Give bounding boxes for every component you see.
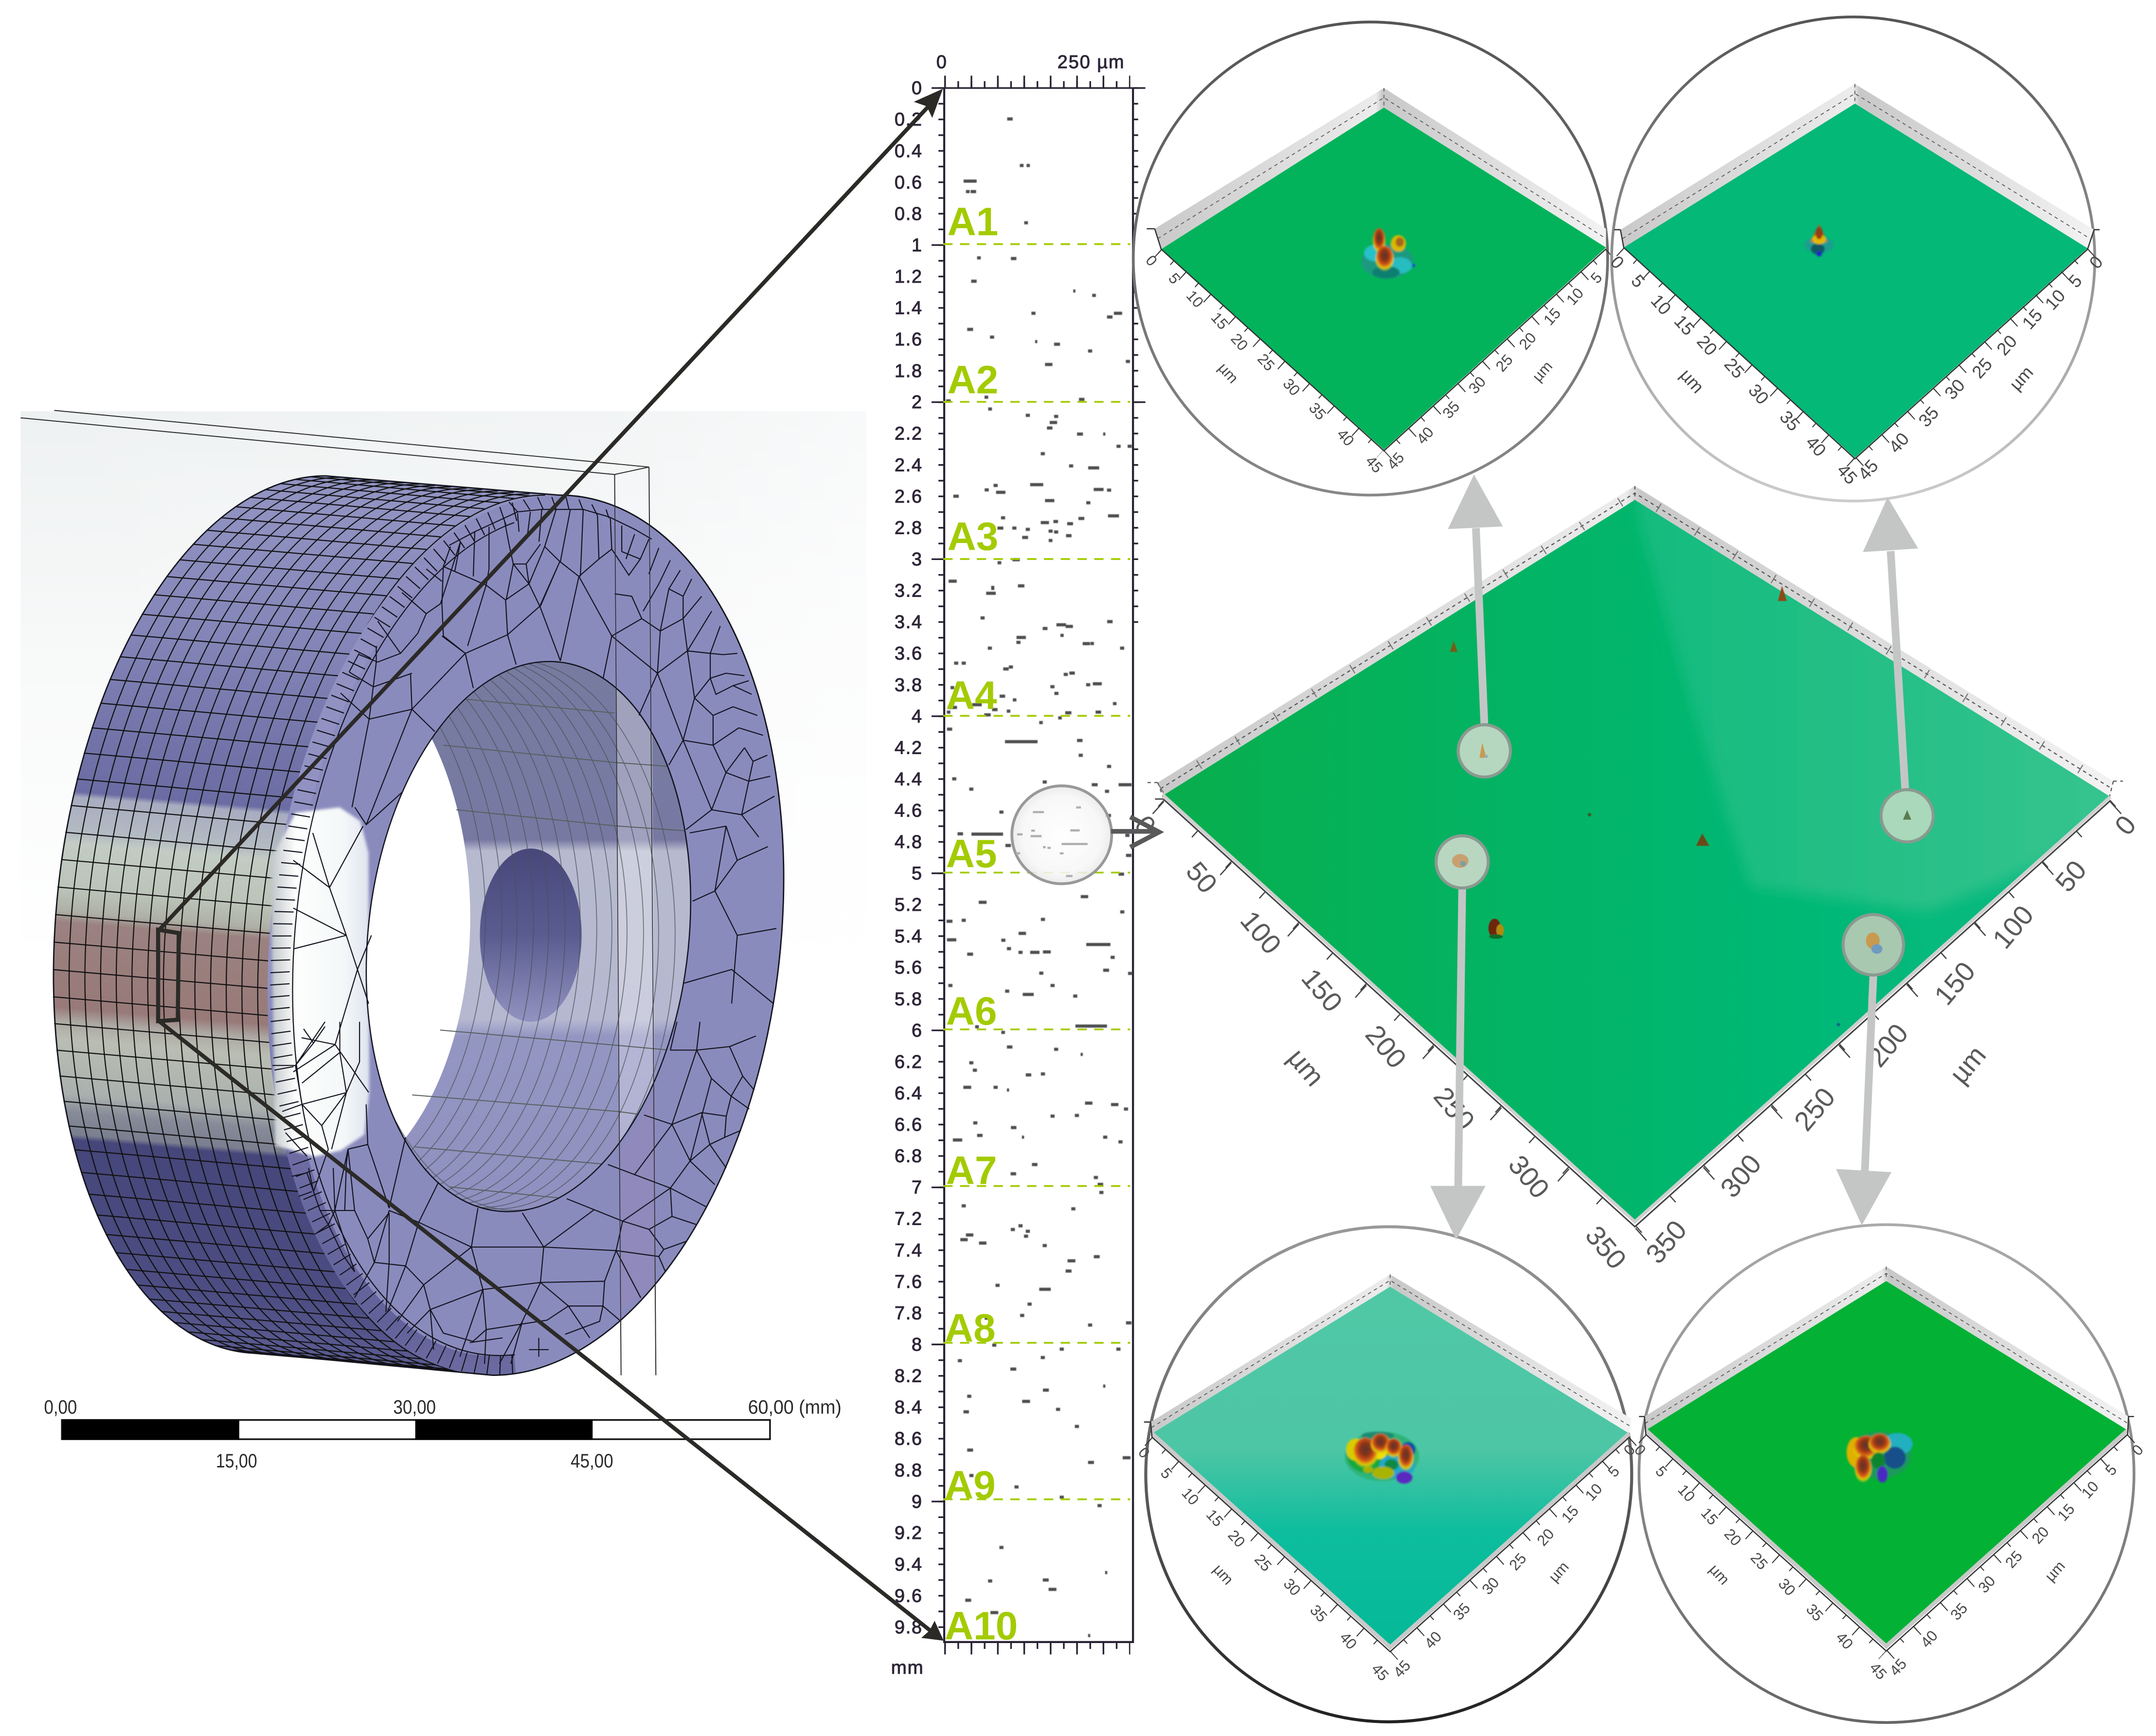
- depth axis labels in mm: 4.2: [895, 738, 923, 758]
- zoom B axis labels: 45: [1854, 456, 1882, 484]
- zoom B axis labels: 25: [1968, 354, 1996, 382]
- scale bar: 15,00: [216, 1450, 257, 1472]
- depth axis labels in mm: 8.6: [895, 1429, 923, 1449]
- depth axis labels in mm: 2.4: [895, 455, 923, 475]
- depth axis labels in mm: 3.2: [895, 580, 923, 601]
- depth axis labels in mm: 8: [912, 1335, 923, 1355]
- depth axis labels in mm: 3.8: [895, 675, 923, 695]
- zoom A axis labels: 15: [1208, 309, 1232, 333]
- section labels A1 to A10: A4: [946, 673, 997, 718]
- plane lines over ring: [614, 467, 656, 1375]
- zoom A axis labels: 30: [1465, 373, 1489, 397]
- section labels A1 to A10: A7: [946, 1149, 997, 1193]
- zoom B axis labels: 5: [1627, 271, 1649, 291]
- depth axis labels in mm: 0: [912, 78, 923, 99]
- axes with ticks: [1155, 796, 2116, 1235]
- zoom circle: particle top left: [1133, 22, 1610, 495]
- zoom A axis labels: 40: [1333, 426, 1358, 450]
- depth axis labels in mm: 0.4: [895, 141, 923, 162]
- ring side surface with coloured load bands: [54, 477, 553, 1370]
- zoom A axis labels: 15: [1540, 305, 1564, 328]
- zoom D axis labels: µm: [1706, 1561, 1733, 1588]
- zoom C axis labels: µm: [1210, 1561, 1237, 1588]
- zoom D axis labels: 45: [1866, 1659, 1890, 1683]
- zoom A axis labels: 45: [1362, 452, 1386, 476]
- depth axis labels in mm: 1: [912, 235, 923, 255]
- strip frame and axes: [932, 82, 1145, 1648]
- left axis labels: 350: [1580, 1220, 1633, 1275]
- zoom D axis labels: 15: [1698, 1504, 1722, 1528]
- right axis labels: 300: [1714, 1148, 1767, 1203]
- scale bar: [44, 1397, 842, 1472]
- side mesh lines: [37, 477, 546, 1373]
- depth axis labels in mm: 7: [912, 1177, 923, 1198]
- zoom D axis labels: [1631, 1441, 2147, 1683]
- defect particles in strip: [946, 119, 1132, 1636]
- zoom C axis labels: 20: [1533, 1525, 1558, 1549]
- zoom C axis labels: 40: [1421, 1628, 1445, 1652]
- grey arrow: marker to top-right zoom: [1863, 497, 1918, 789]
- white heated patch on chamfer: [271, 807, 369, 1157]
- zoom B axis labels: 15: [2018, 305, 2047, 333]
- zoom A axis labels: 10: [1563, 285, 1587, 308]
- zoom C axis labels: 25: [1251, 1551, 1275, 1574]
- depth axis labels in mm: 0.8: [895, 204, 923, 224]
- marker lens: lower left particle: [1436, 836, 1488, 888]
- green dashed section lines: [943, 244, 1130, 1500]
- bore longitudinal mesh lines, lower: [412, 1030, 670, 1199]
- right axis labels: 0: [2109, 810, 2142, 841]
- zoom D axis labels: 20: [2029, 1523, 2052, 1547]
- depth axis labels in mm: 8.2: [895, 1366, 923, 1386]
- marker lens: upper right particle: [1881, 790, 1933, 842]
- zoom A axis labels: 25: [1254, 350, 1278, 374]
- section labels A1 to A10: A1: [947, 199, 998, 244]
- zoom B axis labels: 45: [1833, 460, 1861, 488]
- depth axis labels in mm: 1.6: [895, 329, 923, 350]
- zoom B axis labels: 20: [1693, 331, 1721, 360]
- left axis labels: 0: [1129, 810, 1162, 841]
- zoom B axis labels: 40: [1802, 432, 1830, 460]
- zoom D axis labels: 5: [1652, 1463, 1671, 1481]
- depth axis labels in mm: 1.4: [895, 298, 923, 319]
- depth axis labels in mm: 9.6: [895, 1586, 923, 1606]
- panel background: pale gradient behind mesh model: [20, 411, 866, 961]
- depth axis labels in mm: 9.2: [895, 1523, 923, 1543]
- depth axis labels in mm: 6.6: [895, 1115, 923, 1135]
- zoom A axis labels: 20: [1227, 330, 1251, 354]
- large 3D surface map: [1129, 468, 2145, 1275]
- zoom B axis labels: 25: [1720, 354, 1748, 382]
- scale bar: 45,00: [571, 1450, 613, 1472]
- scale bar: 0,00: [44, 1397, 77, 1418]
- section labels A1 to A10: A8: [945, 1306, 996, 1350]
- left axis labels: 200: [1360, 1019, 1413, 1074]
- zoom B axis labels: µm: [1676, 365, 1708, 397]
- zoom D axis labels: 0: [1631, 1441, 1649, 1459]
- zoom B axis labels: 10: [2041, 286, 2069, 314]
- depth axis labels in mm: 5.2: [895, 895, 923, 915]
- depth axis labels in mm: 4.4: [895, 769, 923, 790]
- zoom C axis labels: 25: [1506, 1550, 1529, 1573]
- right axis labels: µm: [1943, 1040, 1992, 1089]
- plane tint on lower right of face: [622, 1093, 654, 1309]
- right axis labels: 50: [2049, 854, 2092, 898]
- zoom D axis labels: 45: [1886, 1655, 1910, 1679]
- depth axis labels in mm: 8.8: [895, 1460, 923, 1481]
- depth axis labels in mm: 2.8: [895, 518, 923, 539]
- depth axis labels in mm: 1.2: [895, 267, 923, 287]
- depth axis labels in mm: 5.8: [895, 989, 923, 1010]
- zoom A axis labels: 20: [1516, 329, 1540, 353]
- surface defect blob A: [1361, 228, 1415, 278]
- depth axis labels in mm: 0.2: [895, 109, 923, 130]
- depth axis labels in mm: 0.6: [895, 172, 923, 193]
- zoom B axis labels: 15: [1671, 311, 1698, 339]
- arrow: mesh box to strip top: [158, 89, 943, 931]
- zoom B axis labels: µm: [2005, 362, 2037, 394]
- face mesh, upper right quadrant: [341, 497, 774, 837]
- magnifier lens on strip: [1012, 786, 1112, 884]
- depth axis labels in mm: [891, 78, 924, 1678]
- right axis labels: 250: [1788, 1082, 1841, 1137]
- right axis labels: 150: [1928, 956, 1981, 1011]
- section labels A1 to A10: A3: [947, 515, 998, 559]
- depth axis labels in mm: 2.6: [895, 487, 923, 507]
- depth axis labels in mm: 4: [912, 706, 923, 727]
- right axis labels: 200: [1861, 1018, 1914, 1073]
- translucent plane tint inside bore: [616, 687, 654, 1150]
- zoom A axis labels: 30: [1279, 375, 1304, 399]
- depth axis labels in mm: 6.8: [895, 1146, 923, 1167]
- zoom D axis labels: 40: [1833, 1629, 1856, 1653]
- zoom B axis labels: 40: [1885, 429, 1913, 457]
- see-through opening of bore: [367, 739, 470, 1139]
- left axis labels: 50: [1180, 856, 1223, 899]
- zoom D axis labels: 0: [2128, 1441, 2147, 1459]
- zoom D axis labels: 30: [1775, 1575, 1799, 1599]
- zoom B axis labels: 35: [1915, 403, 1942, 431]
- zoom C axis labels: 0: [1135, 1444, 1153, 1462]
- depth axis labels in mm: 1.8: [895, 361, 923, 381]
- depth axis labels in mm: 7.2: [895, 1209, 923, 1230]
- zoom B axis labels: 30: [1744, 380, 1773, 408]
- top axis labels in micrometres: 0: [936, 52, 947, 72]
- section labels A1 to A10: [945, 199, 1018, 1648]
- chamfer radial ticks and bore rim: [250, 512, 721, 1365]
- surface defect blob D: [1847, 1431, 1913, 1483]
- depth axis labels in mm: 3.6: [895, 644, 923, 664]
- top axis labels in micrometres: 250 µm: [1058, 52, 1125, 72]
- zoom C axis labels: 15: [1558, 1502, 1582, 1526]
- zoom C axis labels: 45: [1390, 1657, 1414, 1681]
- left axis labels: 100: [1234, 905, 1287, 960]
- front face of ring with chamfer strip: [237, 495, 815, 1375]
- surface defect blob B: [1805, 224, 1833, 256]
- face mesh, middle and patch fan: [293, 826, 776, 1092]
- depth axis labels in mm: 6: [912, 1020, 923, 1041]
- depth axis labels in mm: 7.8: [895, 1303, 923, 1324]
- zoom A axis labels: 10: [1183, 287, 1207, 311]
- depth axis labels in mm: 3.4: [895, 612, 923, 633]
- right axis labels: [1639, 810, 2142, 1269]
- zoom A axis labels: 35: [1306, 399, 1330, 423]
- lighter tone region: [1635, 468, 2145, 912]
- depth axis labels in mm: 8.4: [895, 1397, 923, 1418]
- zoom C axis labels: 45: [1368, 1660, 1392, 1684]
- arrow: magnifier to large surface: [1111, 817, 1159, 847]
- zoom A axis labels: 25: [1492, 351, 1516, 375]
- depth axis labels in mm: 4.8: [895, 832, 923, 852]
- zoom C axis labels: 35: [1450, 1600, 1473, 1624]
- zoom C axis labels: [1135, 1441, 1638, 1684]
- plane lines: section plane outline: [20, 410, 656, 1375]
- zoom A axis labels: 0: [1142, 252, 1161, 270]
- ring outline: [21, 476, 816, 1375]
- mesh ring model: [53, 475, 784, 1376]
- zoom circle: particle top right: [1606, 17, 2107, 501]
- depth scan strip: [891, 52, 1159, 1678]
- zoom B axis labels: 35: [1776, 407, 1804, 435]
- zoom C axis labels: 15: [1203, 1506, 1227, 1530]
- zoom D axis labels: 10: [2078, 1478, 2102, 1502]
- zoom C axis labels: 5: [1604, 1463, 1623, 1481]
- zoom C axis labels: µm: [1545, 1558, 1572, 1585]
- left axis labels: 250: [1428, 1081, 1481, 1136]
- zoom D axis labels: 40: [1917, 1627, 1941, 1651]
- zoom D axis labels: 15: [2054, 1501, 2078, 1524]
- grey arrow: marker to top-left zoom: [1448, 474, 1503, 723]
- zoom A axis labels: µm: [1215, 360, 1242, 387]
- zoom A axis labels: 5: [1165, 270, 1184, 288]
- depth axis labels in mm: 6.2: [895, 1052, 923, 1072]
- section labels A1 to A10: A10: [945, 1604, 1018, 1648]
- right axis labels: 350: [1639, 1214, 1692, 1269]
- zoom D axis labels: 35: [1947, 1600, 1971, 1624]
- marker lens: lower right particle: [1843, 915, 1904, 975]
- left axis labels: 150: [1295, 963, 1348, 1018]
- radial cross hole: [480, 849, 582, 1022]
- zoom B axis labels: 0: [1606, 252, 1628, 272]
- zoom C axis labels: 40: [1336, 1629, 1360, 1653]
- zoom C axis labels: 10: [1581, 1480, 1606, 1504]
- depth axis labels in mm: 7.4: [895, 1240, 923, 1261]
- arrow: mesh box to strip bottom: [158, 1020, 944, 1641]
- zoom C axis labels: 30: [1280, 1575, 1304, 1599]
- left axis labels: 300: [1503, 1149, 1556, 1204]
- depth axis labels in mm: 3: [912, 549, 923, 570]
- zoom D axis labels: 25: [1747, 1549, 1771, 1573]
- section labels A1 to A10: A9: [945, 1463, 996, 1507]
- depth axis labels in mm: 2.2: [895, 424, 923, 444]
- marker lens: upper left particle: [1458, 725, 1510, 777]
- zoom D axis labels: 25: [2002, 1547, 2026, 1572]
- depth axis labels in mm: mm: [891, 1658, 924, 1678]
- zoom C axis labels: 10: [1178, 1484, 1203, 1508]
- zoom B axis labels: 20: [1993, 331, 2021, 359]
- depth axis labels in mm: 7.6: [895, 1272, 923, 1292]
- depth axis labels in mm: 5.4: [895, 926, 923, 947]
- zoom C axis labels: 30: [1478, 1574, 1503, 1598]
- zoom D axis labels: µm: [2042, 1557, 2068, 1585]
- sampling box on ring: [158, 930, 179, 1021]
- zoom C axis labels: 35: [1307, 1602, 1330, 1626]
- zoom circle: particle bottom right: [1631, 1225, 2147, 1722]
- face mesh, lower half: [272, 1022, 756, 1364]
- depth axis labels in mm: 9.4: [895, 1555, 923, 1575]
- depth axis labels in mm: 5: [912, 864, 923, 884]
- zoom A axis labels: 45: [1383, 449, 1408, 473]
- zoom A axis labels: 40: [1413, 424, 1437, 448]
- left axis labels: µm: [1282, 1043, 1330, 1092]
- zoom C axis labels: 5: [1157, 1465, 1176, 1482]
- section labels A1 to A10: A2: [947, 358, 998, 402]
- bore mesh arcs: [163, 644, 675, 1210]
- depth axis labels in mm: 2: [912, 392, 923, 413]
- zoom D axis labels: 35: [1803, 1601, 1827, 1625]
- bore longitudinal mesh lines, upper: [443, 699, 686, 831]
- depth axis labels in mm: 6.4: [895, 1084, 923, 1104]
- zoom B axis labels: 0: [2085, 252, 2107, 272]
- section labels A1 to A10: A6: [946, 989, 997, 1033]
- section labels A1 to A10: A5: [946, 832, 997, 876]
- zoom D axis labels: 20: [1721, 1525, 1745, 1549]
- left axis labels: [1129, 810, 1633, 1275]
- bore interior: [367, 662, 690, 1211]
- zoom B axis labels: 10: [1647, 290, 1675, 319]
- back walls: [1158, 486, 2113, 797]
- zoom B axis labels: 5: [2065, 271, 2086, 291]
- zoom A axis labels: µm: [1529, 358, 1556, 385]
- scale bar: 60,00 (mm): [748, 1397, 842, 1418]
- zoom C axis labels: 0: [1620, 1441, 1638, 1459]
- particles on surface: [1450, 586, 1840, 1026]
- zoom A axis labels: [1142, 252, 1605, 476]
- depth axis labels in mm: 4.6: [895, 800, 923, 821]
- right axis labels: 100: [1987, 900, 2039, 954]
- zoom D axis labels: 5: [2102, 1461, 2120, 1479]
- depth axis labels in mm: 5.6: [895, 958, 923, 978]
- zoom D axis labels: 10: [1674, 1481, 1698, 1505]
- depth axis labels in mm: 9.8: [895, 1617, 923, 1638]
- zoom B axis labels: 30: [1940, 375, 1969, 403]
- scale bar: 30,00: [393, 1397, 436, 1418]
- zoom A axis labels: 5: [1587, 269, 1605, 287]
- zoom D axis labels: 30: [1975, 1573, 1999, 1596]
- grey arrow: marker to bottom-right zoom: [1836, 976, 1891, 1225]
- zoom B axis labels: [1606, 252, 2107, 488]
- depth axis labels in mm: 9: [912, 1492, 923, 1512]
- zoom A axis labels: 35: [1439, 398, 1463, 422]
- zoom C axis labels: 20: [1224, 1527, 1248, 1551]
- top axis labels in micrometres: [936, 52, 1125, 72]
- grey arrow: marker to bottom-left zoom: [1430, 889, 1486, 1240]
- zoom circle: particle bottom left: [1135, 1227, 1638, 1722]
- surface defect blob C: [1345, 1431, 1419, 1483]
- green surface: [1163, 500, 2110, 1222]
